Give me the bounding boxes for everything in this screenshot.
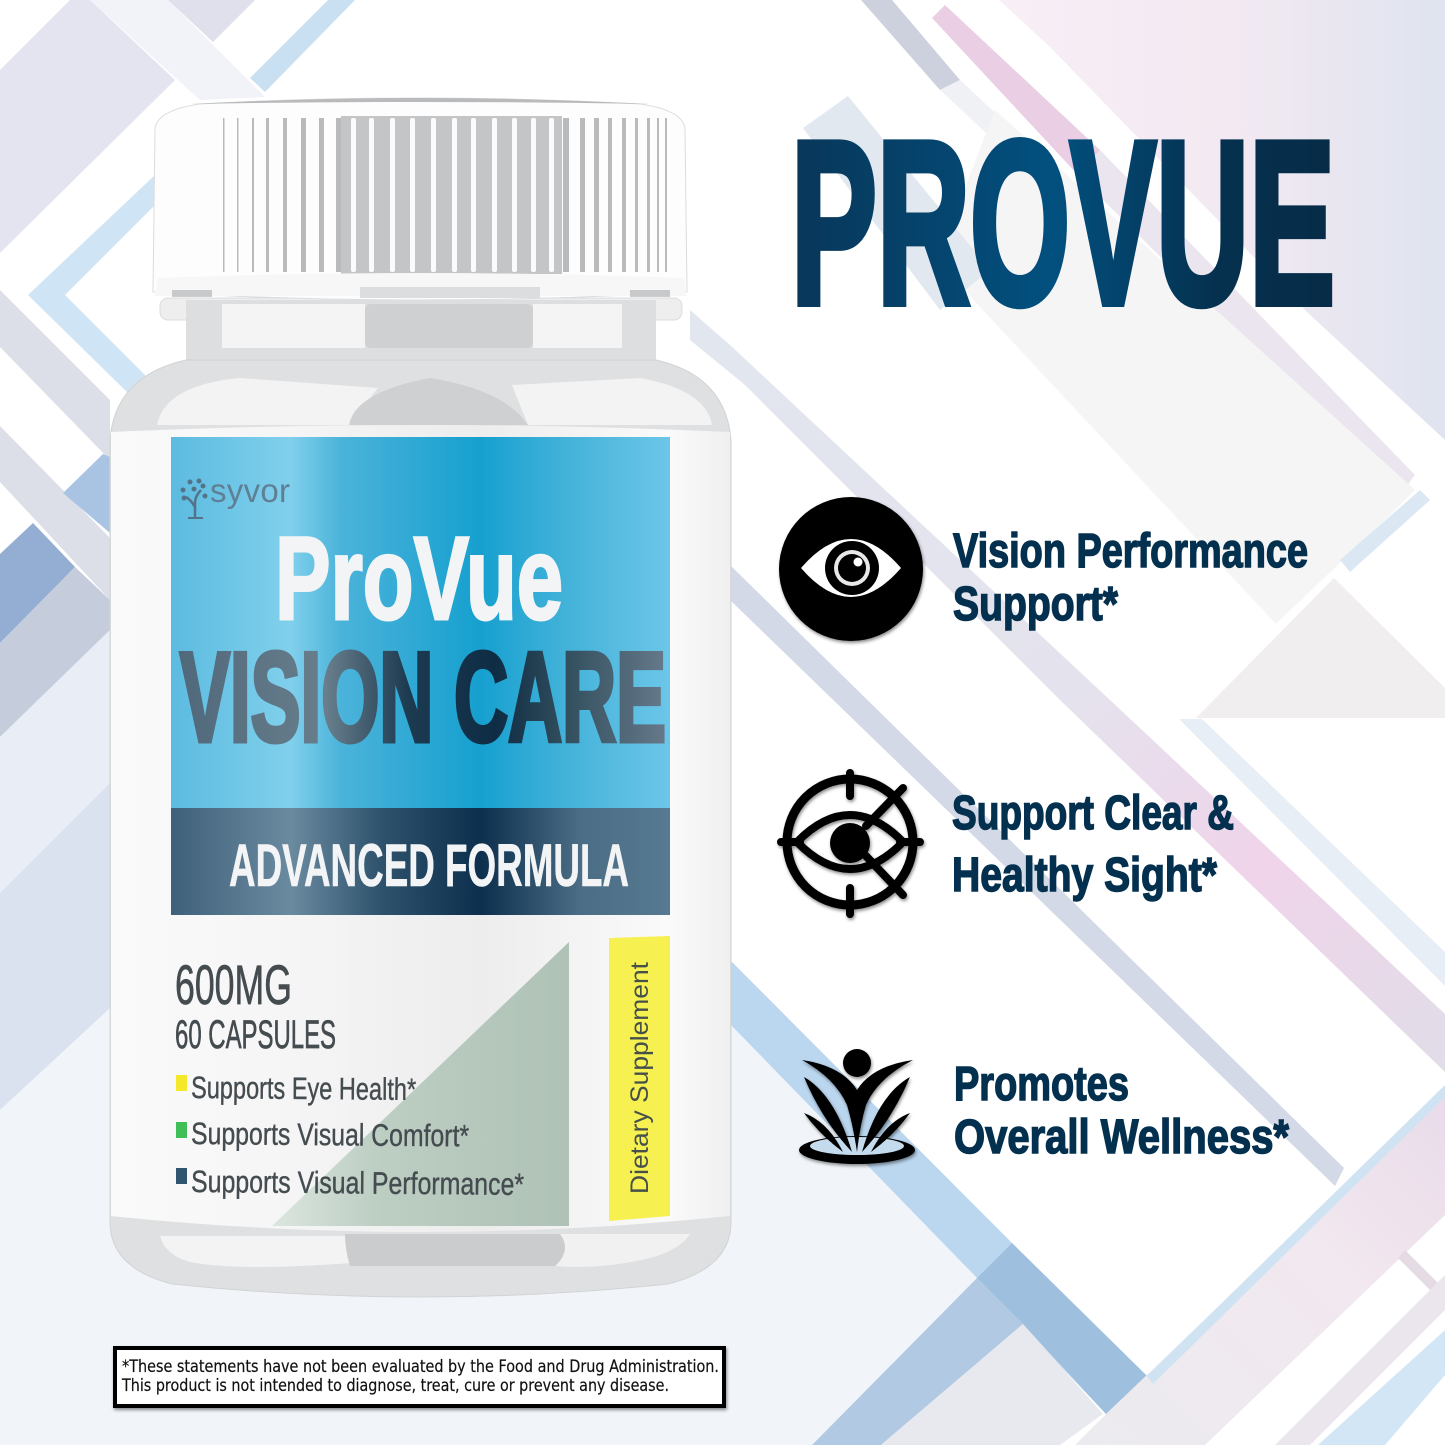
icon: wellness figure	[799, 1049, 915, 1164]
advanced formula band	[171, 808, 670, 915]
text: vision performance: Vision Performance	[953, 525, 1308, 578]
text: wellness: Overall Wellness*	[954, 1111, 1289, 1164]
label bullets: Supports Eye Health*	[191, 1070, 416, 1107]
icon: eye in crosshair	[781, 773, 920, 914]
icon: eye in black circle	[779, 497, 923, 641]
cap ribs centre	[351, 118, 554, 272]
bottle neck	[160, 298, 682, 364]
bottle cap	[153, 98, 687, 300]
label triangle	[272, 942, 569, 1226]
bottle body	[110, 360, 731, 1297]
product name: ProVue	[275, 513, 563, 645]
dosage: 600MG	[175, 953, 292, 1016]
text: wellness	[954, 1058, 1289, 1164]
brand: syvor	[182, 472, 290, 518]
text: vision performance: Support*	[953, 578, 1118, 631]
brand: syvor: syvor	[210, 472, 290, 509]
shoulder highlights	[157, 378, 712, 425]
cap ribs left	[223, 118, 667, 272]
VISION CARE: VISION CARE	[180, 626, 666, 768]
icon: tree	[182, 480, 206, 518]
dietary supplement strip: Dietary Supplement	[626, 962, 654, 1194]
text: clear sight: Support Clear &	[952, 787, 1234, 840]
text: clear sight	[952, 787, 1234, 902]
base highlights	[160, 1234, 690, 1267]
disclaimer box	[115, 1348, 724, 1406]
text: vision performance	[953, 525, 1308, 631]
benefit 1	[779, 497, 1308, 641]
label bullets: Supports Visual Performance*	[191, 1164, 524, 1202]
dietary supplement strip	[609, 936, 670, 1221]
label bullets	[176, 1070, 524, 1202]
disclaimer box: *These statements have not been evaluated by the Food and Drug Administration.	[122, 1357, 719, 1376]
dosage: 60 CAPSULES	[175, 1013, 336, 1057]
label bullets: Supports Visual Comfort*	[191, 1116, 469, 1153]
benefit 3	[799, 1049, 1289, 1164]
text: clear sight: Healthy Sight*	[952, 849, 1217, 902]
white label	[111, 425, 730, 1232]
product bottle	[110, 98, 731, 1297]
advanced formula band: ADVANCED FORMULA	[229, 832, 629, 899]
benefit 2	[781, 773, 1234, 914]
blue label panel	[171, 437, 670, 808]
text: wellness: Promotes	[954, 1058, 1129, 1111]
disclaimer box: This product is not intended to diagnose, treat, cure or prevent any disease.	[121, 1376, 669, 1395]
dosage	[175, 953, 336, 1057]
